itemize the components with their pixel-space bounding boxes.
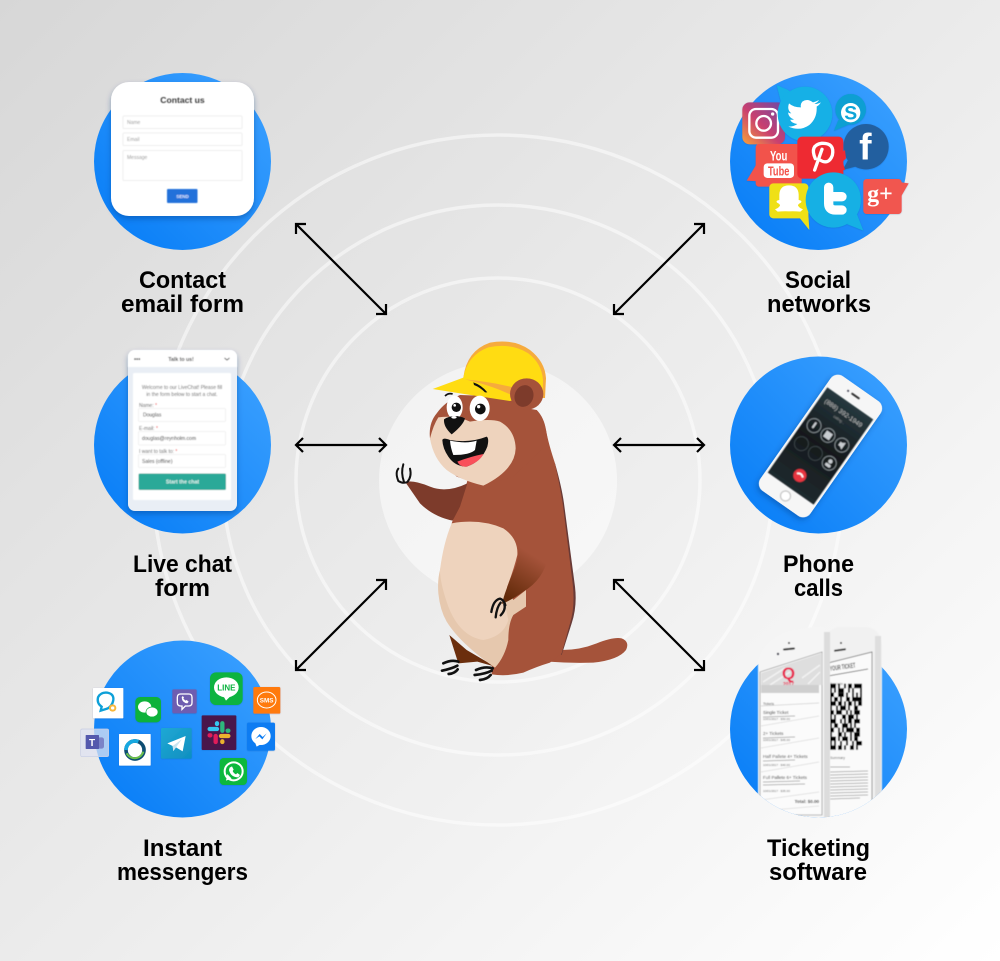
left phone with ticket list: 2017 <box>783 682 794 688</box>
heading: live chat form: Live chat <box>133 552 232 578</box>
icon: sms <box>253 687 280 714</box>
heading: phone calls <box>783 552 854 602</box>
concentric rings <box>153 135 843 825</box>
chat widget: Welcome to our LiveChat! Please fill <box>142 385 222 391</box>
panel: live chat form <box>94 350 271 534</box>
heading: ticketing software: Ticketing <box>767 836 870 862</box>
chat widget: Douglas <box>143 412 162 418</box>
icon: wechat <box>135 697 161 722</box>
arrow: ticketing to mascot <box>614 580 704 670</box>
chat widget: douglas@reynholm.com <box>142 436 196 442</box>
left phone with ticket list: Half Pallete 4+ Tickets <box>763 754 808 759</box>
left phone with ticket list: Full Pallete 6+ Tickets <box>763 775 808 780</box>
social icons cluster: g+ <box>867 182 893 208</box>
icon: line <box>210 672 243 705</box>
right phone with QR: Barcode <box>830 682 843 686</box>
social icons cluster: Tube <box>768 164 789 178</box>
chat widget: E-mail: * <box>139 426 158 432</box>
right phone with QR: YOUR TICKET <box>829 662 856 673</box>
arrow: social networks to mascot <box>614 224 704 314</box>
left phone with ticket list: Tickets <box>763 702 774 706</box>
panel: instant messengers <box>81 640 280 818</box>
left phone with ticket list <box>758 627 830 830</box>
smartphone: (888) 392-1949 <box>823 398 864 429</box>
left phone with ticket list: 10/01/2017 · $40.00 <box>763 763 790 767</box>
panel: phone calls <box>730 356 907 534</box>
ticket phones <box>758 627 882 830</box>
heading: live chat form <box>133 552 232 602</box>
heading: social networks: networks <box>767 292 871 318</box>
heading: instant messengers: Instant <box>143 836 222 862</box>
left phone with ticket list: 10/01/2017 · $50.00 <box>763 717 790 721</box>
chat widget: Talk to us! <box>168 357 194 363</box>
form card: Name <box>127 120 141 126</box>
heading: social networks: Social <box>785 268 851 294</box>
form card: SEND <box>176 194 189 199</box>
icon: messenger <box>247 723 275 751</box>
chat widget: I want to talk to: * <box>139 449 177 455</box>
chat widget: Sales (offline) <box>142 459 173 465</box>
arrow: contact form to mascot <box>296 224 386 314</box>
icon: teams: T <box>89 738 95 749</box>
form card <box>111 82 254 216</box>
left phone with ticket list: Q <box>782 664 795 683</box>
panel: ticketing software <box>730 627 907 830</box>
social icons cluster: S <box>844 104 857 125</box>
right phone with QR <box>828 636 883 817</box>
heading: instant messengers: messengers <box>117 860 248 886</box>
icon: whatsapp <box>220 758 247 785</box>
chat widget: Start the chat <box>166 480 199 486</box>
social icons cluster: f <box>859 125 872 167</box>
arrow: phone calls to mascot <box>614 438 704 452</box>
chat widget: ••• <box>134 357 140 363</box>
heading: ticketing software: software <box>769 860 867 886</box>
form card: Email <box>127 137 140 143</box>
social icons cluster: You <box>770 148 787 164</box>
left phone with ticket list: Single Ticket <box>763 710 789 715</box>
heading: social networks <box>767 268 871 318</box>
left phone with ticket list: 2+ Tickets <box>763 731 784 736</box>
icon: sms: SMS <box>260 697 274 704</box>
heading: contact email form <box>121 268 244 318</box>
icon: teams <box>81 729 109 757</box>
right phone with QR: Summary <box>830 756 845 760</box>
arrow: live chat to mascot <box>296 438 386 452</box>
heading: instant messengers <box>117 836 248 886</box>
heading: live chat form: form <box>155 576 210 602</box>
icon: line: LINE <box>217 683 236 692</box>
central disc <box>379 362 617 600</box>
left phone with ticket list: 10/01/2017 · $45.00 <box>763 738 790 742</box>
form card: Message <box>127 155 148 161</box>
heading: ticketing software <box>767 836 870 886</box>
icon: slack <box>202 715 236 750</box>
chat widget <box>128 350 237 511</box>
panel: social networks <box>730 73 909 250</box>
form card: Contact us <box>160 95 205 105</box>
icon: webex <box>119 734 151 766</box>
smartphone: calling... <box>832 414 845 425</box>
social icons cluster <box>742 85 909 231</box>
chat widget: in the form below to start a chat. <box>146 392 218 398</box>
mascot: beaver with hard hat <box>397 341 627 680</box>
arrow: messengers to mascot <box>296 580 386 670</box>
icon: telegram <box>161 728 192 759</box>
heading: contact email form: email form <box>121 292 244 318</box>
messenger icons cluster <box>81 672 280 785</box>
icon: webex teams <box>93 688 123 718</box>
left phone with ticket list: Total: $0.00 <box>795 799 819 804</box>
heading: phone calls: Phone <box>783 552 854 578</box>
left phone with ticket list: 10/01/2017 · $35.00 <box>763 789 790 793</box>
chat widget: Name: * <box>139 403 157 409</box>
smartphone <box>755 371 886 521</box>
panel: contact email form <box>94 73 271 250</box>
heading: contact email form: Contact <box>139 268 226 294</box>
QR code <box>830 686 862 748</box>
icon: viber <box>172 689 197 713</box>
heading: phone calls: calls <box>794 576 843 602</box>
